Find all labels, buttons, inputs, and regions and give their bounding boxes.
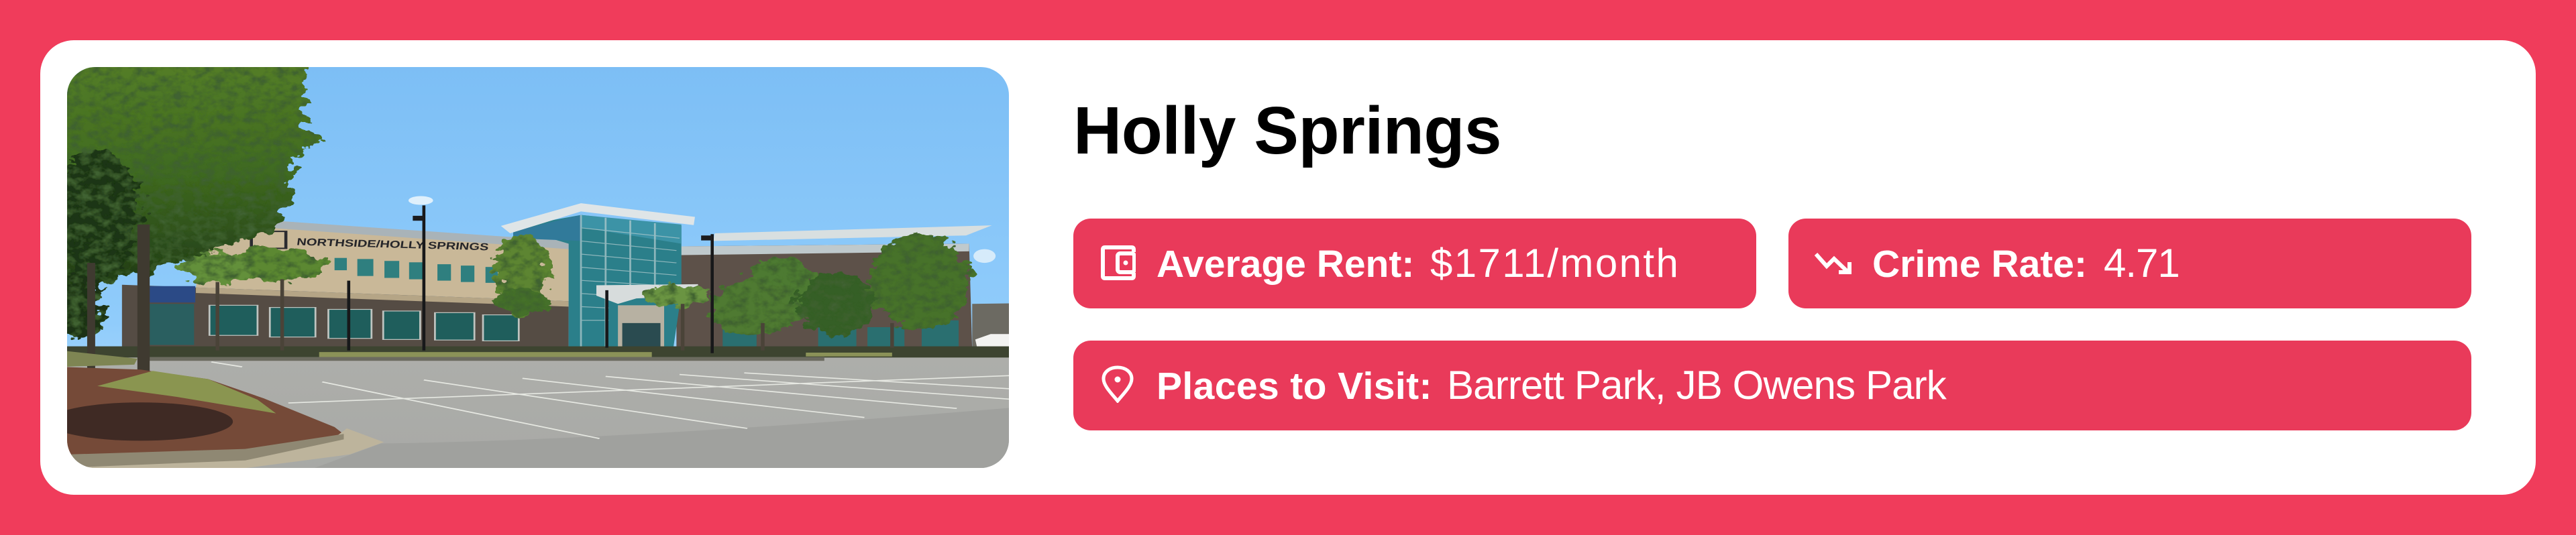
curb (70, 428, 384, 468)
glass tower (513, 215, 682, 348)
icon: trending down arrow (1815, 253, 1851, 274)
pill: average rent (1073, 219, 1756, 308)
building sign: NORTHSIDE/HOLLY SPRINGS (296, 237, 490, 253)
pill: crime rate (1788, 219, 2471, 308)
large left tree (48, 52, 322, 339)
small tree trunks (217, 280, 892, 351)
landscaped island (60, 367, 347, 456)
title: Holly Springs (1073, 93, 1501, 168)
label: crime rate: Crime Rate: (1872, 243, 2087, 286)
parking lines (211, 362, 1009, 438)
asphalt (60, 357, 1046, 494)
right wing (676, 243, 972, 351)
sky (60, 60, 1046, 389)
ground strip (60, 347, 1046, 359)
value: places: Barrett Park, JB Owens Park (1447, 363, 1946, 408)
upper windows (335, 258, 498, 283)
icon: map pin (1102, 366, 1134, 403)
pill: places to visit (1073, 341, 2471, 430)
label: average rent: Average Rent: (1157, 243, 1414, 286)
left wing of building (196, 221, 569, 301)
label: places to visit: Places to Visit: (1157, 365, 1432, 408)
lamp posts (349, 205, 712, 353)
front trees along building (180, 235, 970, 335)
icon: wallet (1101, 245, 1136, 280)
van right (975, 334, 1009, 353)
value: rent: $1711/month (1430, 241, 1680, 286)
entrance canopy (596, 284, 698, 304)
value: crime rate: 4.71 (2104, 241, 2180, 286)
lower windows (209, 305, 519, 341)
photo: Northside Holly Springs medical building (67, 67, 1009, 468)
tree trunks (91, 225, 144, 408)
